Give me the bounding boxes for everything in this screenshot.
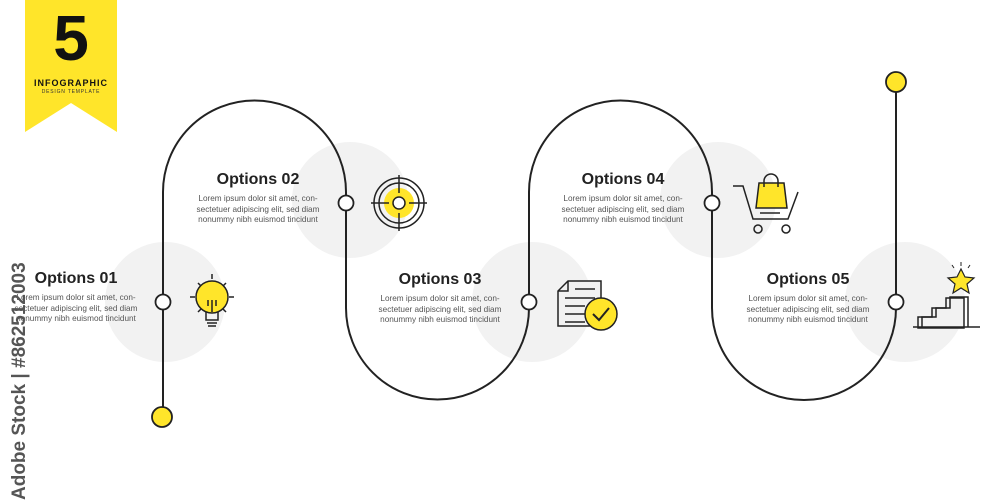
text: option 04: Options 04	[582, 171, 664, 188]
ribbon badge: 5	[53, 2, 89, 74]
text: option 03: Lorem ipsum dolor sit amet, con-	[380, 294, 500, 303]
text: option 02: sectetuer adipiscing elit, sed diam	[197, 204, 319, 214]
text: option 01: Options 01	[35, 270, 117, 287]
icon: cart	[733, 174, 798, 233]
text: option 05: Options 05	[767, 271, 849, 288]
watermark: Adobe Stock | #862512003	[9, 262, 30, 500]
text: option 03: Options 03	[399, 271, 481, 288]
text: option 01: sectetuer adipiscing elit, sed diam	[15, 304, 137, 312]
text: option 05	[746, 271, 869, 324]
text: option 05: sectetuer adipiscing elit, sed diam	[747, 304, 869, 314]
text: option 04	[562, 171, 684, 224]
text: option 01	[14, 270, 137, 323]
text: option 02: Lorem ipsum dolor sit amet, con-	[198, 194, 318, 203]
text: option 02: Options 02	[217, 171, 299, 188]
ribbon badge	[25, 0, 117, 132]
icon: bulb	[190, 274, 234, 326]
icon: document	[558, 281, 617, 330]
text: option 04: sectetuer adipiscing elit, sed diam	[562, 204, 684, 214]
text: option 05: nonummy nibh euismod tincidunt	[748, 315, 868, 324]
text: option 01: Lorem ipsum dolor sit amet, con-	[16, 293, 136, 302]
text: option 03	[378, 271, 501, 324]
text: option 05: Lorem ipsum dolor sit amet, con-	[748, 294, 868, 303]
text: option 03: sectetuer adipiscing elit, sed diam	[379, 304, 501, 314]
text: option 02: nonummy nibh euismod tincidunt	[198, 215, 318, 224]
text: option 01: nonummy nibh euismod tincidunt	[16, 314, 136, 323]
ribbon badge: INFOGRAPHIC	[34, 78, 108, 88]
text: option 02	[196, 171, 319, 224]
icon: stairs	[913, 262, 980, 328]
icon: target	[371, 175, 427, 231]
text: option 04: Lorem ipsum dolor sit amet, con-	[563, 194, 683, 203]
ribbon badge: DESIGN TEMPLATE	[42, 89, 100, 95]
text: option 04: nonummy nibh euismod tincidunt	[563, 215, 683, 224]
text: option 03: nonummy nibh euismod tincidunt	[380, 315, 500, 324]
